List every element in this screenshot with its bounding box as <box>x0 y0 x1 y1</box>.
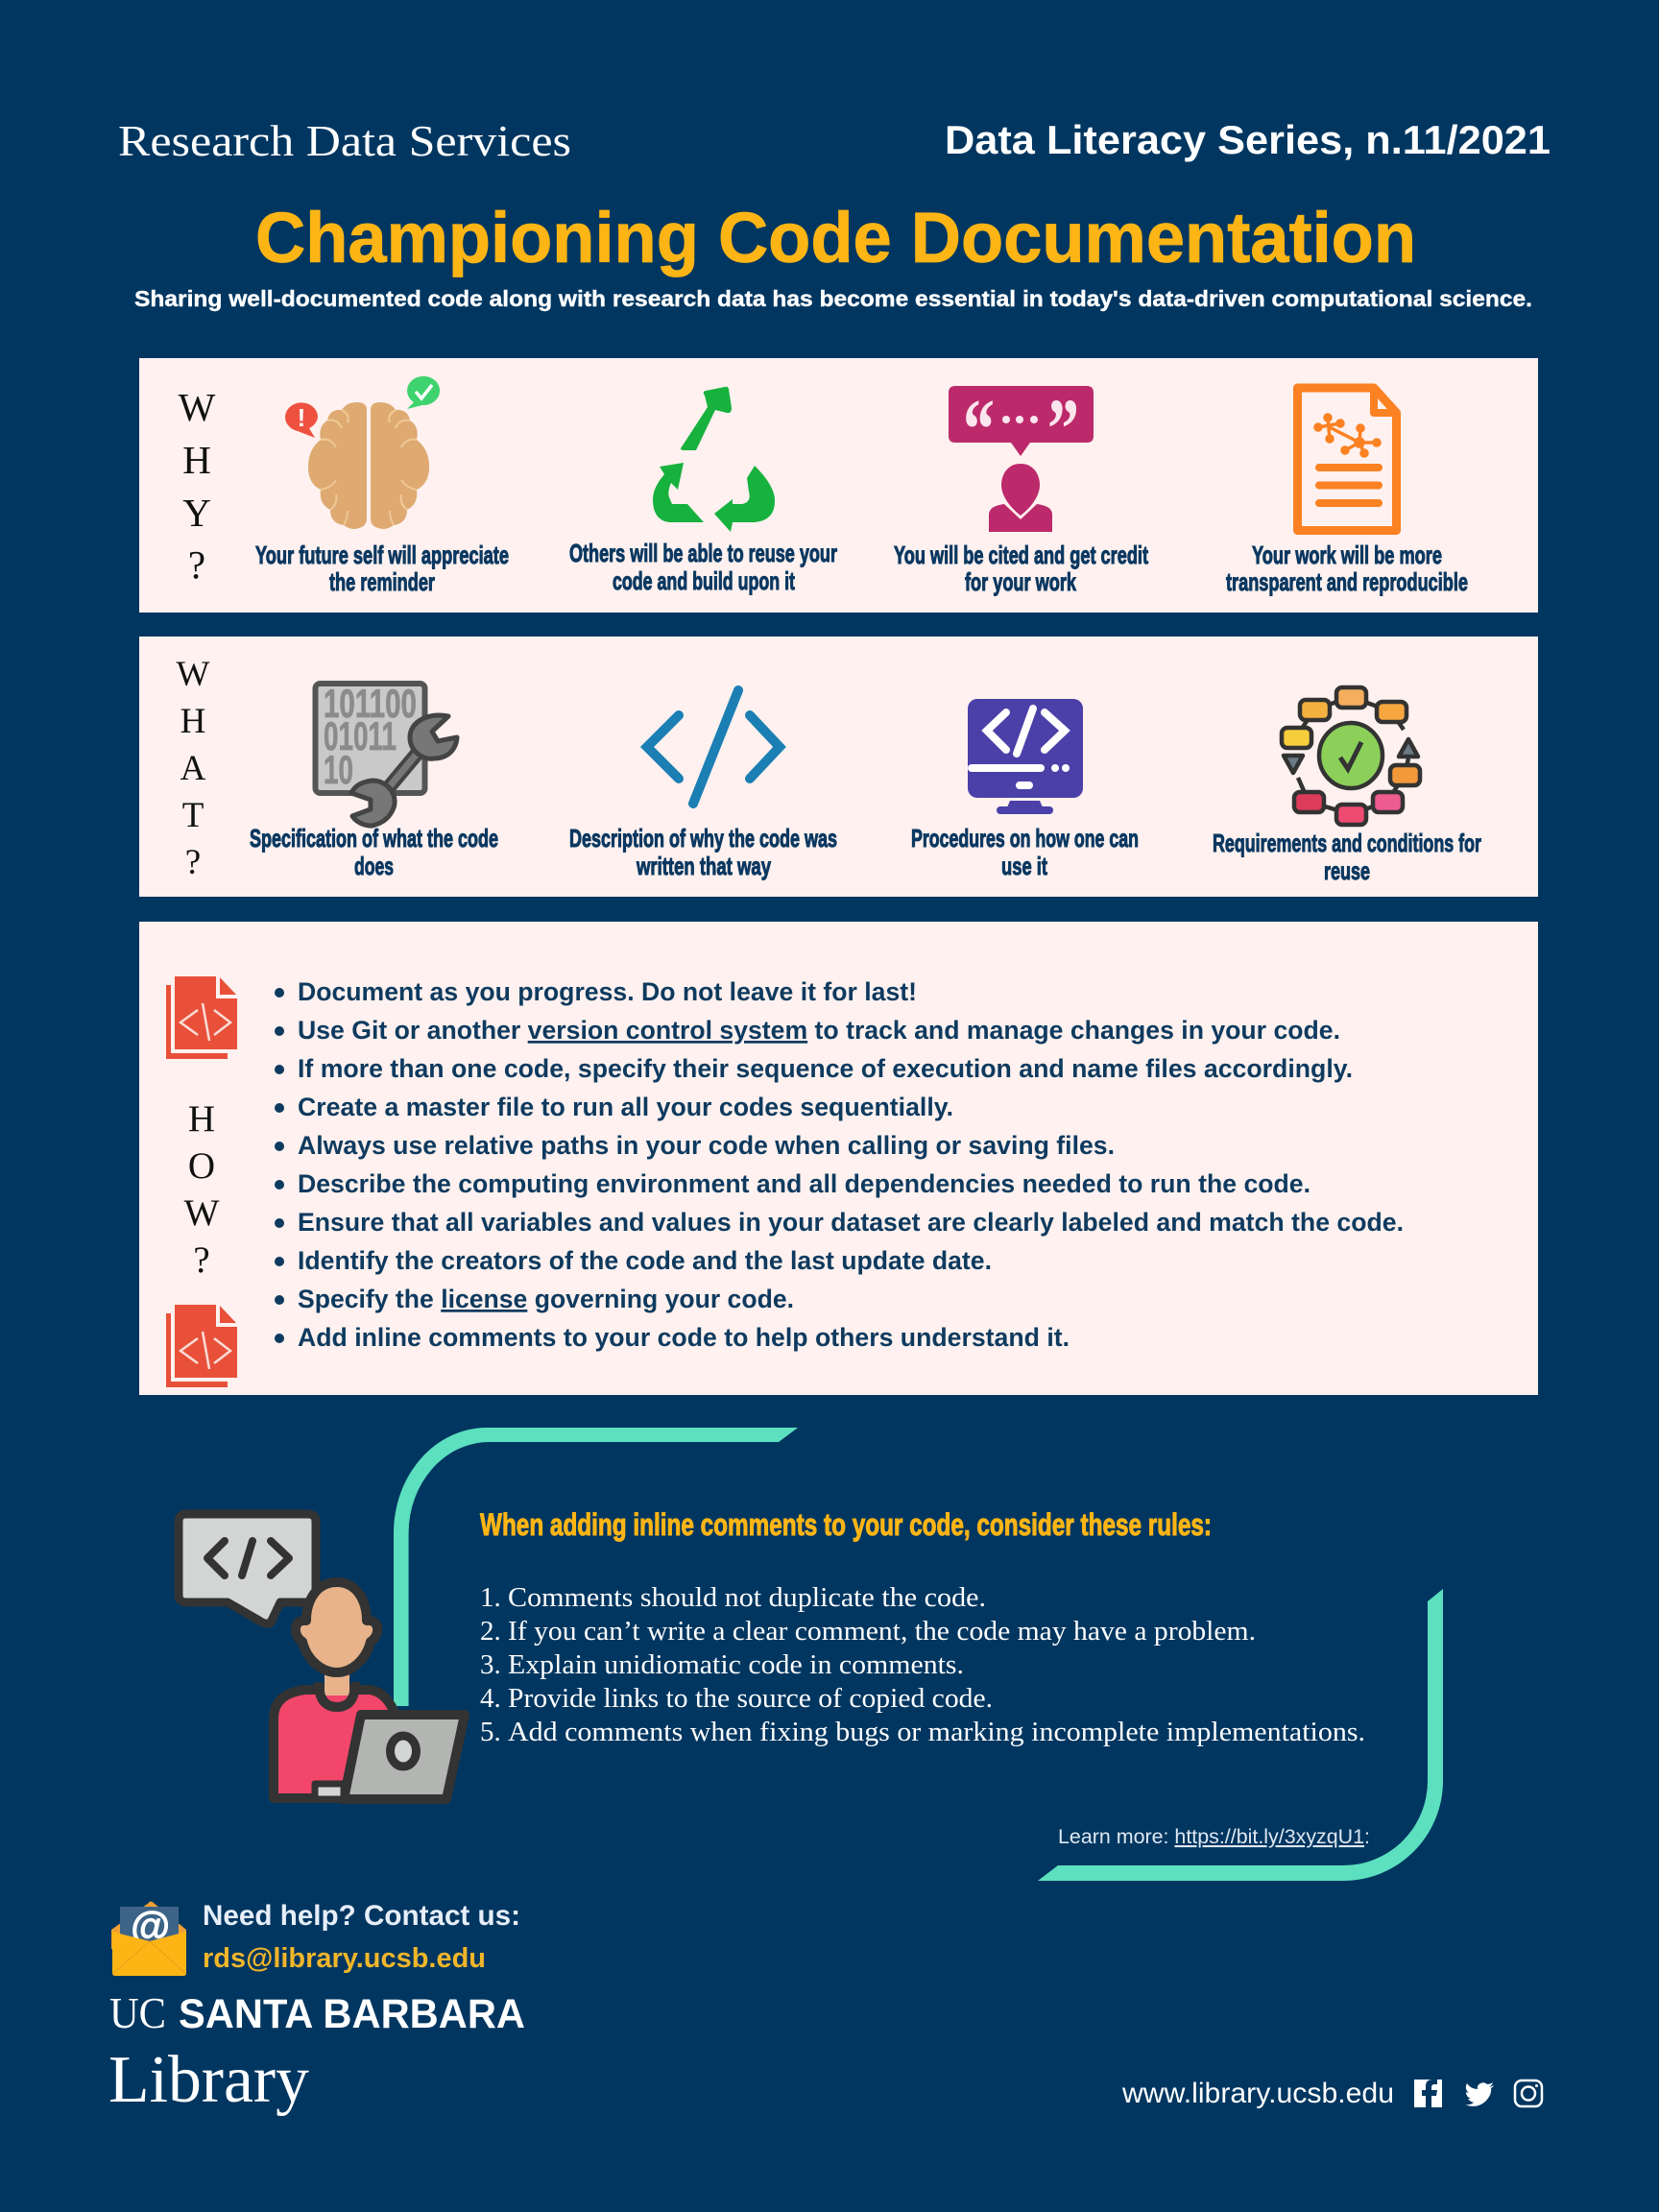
why vertical heading <box>179 385 216 587</box>
numbered rules list: 1. <box>480 1582 501 1613</box>
what vertical heading: T <box>182 796 204 835</box>
numbered rules list: 2. <box>480 1616 501 1647</box>
logo: UC Santa Barbara Library: Library <box>108 2043 309 2117</box>
bullet list: Add inline comments to your code to help others understand it. <box>298 1323 1070 1352</box>
bullet list: Describe the computing environment and all dependencies needed to run the code. <box>298 1169 1310 1198</box>
caption: requirements: reuse <box>1324 856 1370 885</box>
numbered rules list: If you can’t write a clear comment, the code may have a problem. <box>508 1616 1256 1647</box>
panel: why <box>139 358 1538 613</box>
contact email: rds@library.ucsb.edu <box>203 1943 486 1974</box>
icon: brain with speech bubbles: ! <box>298 403 305 432</box>
caption: specification: does <box>354 852 394 880</box>
how vertical heading: ? <box>193 1239 210 1281</box>
caption: future self <box>255 541 509 596</box>
why vertical heading: H <box>182 438 211 482</box>
icon: facebook <box>1414 2080 1442 2107</box>
what vertical heading: W <box>177 655 210 694</box>
numbered rules list: Add comments when fixing bugs or marking incomplete implementations. <box>508 1717 1365 1747</box>
bullet list <box>275 977 1404 1352</box>
caption: description: written that way <box>636 852 771 880</box>
icon: blue code brackets <box>647 690 780 804</box>
bullet list: Identify the creators of the code and the last update date. <box>298 1246 992 1275</box>
logo: UC Santa Barbara Library <box>108 1989 525 2117</box>
caption: requirements <box>1213 829 1481 885</box>
caption: cited: for your work <box>965 567 1076 596</box>
icon: check with workflow loop <box>1282 687 1420 825</box>
heading: inline comment rules: When adding inline comments to your code, consider these rules: <box>480 1507 1212 1542</box>
caption: procedures: use it <box>1001 852 1047 880</box>
caption: future self: Your future self will appreciate <box>255 541 509 569</box>
caption: specification: Specification of what the code <box>250 824 498 853</box>
caption: transparent <box>1226 541 1468 596</box>
caption: requirements: Requirements and conditions for <box>1213 829 1481 857</box>
icon: binary sheet with wrench: 10 <box>324 747 353 792</box>
how vertical heading: O <box>188 1145 215 1187</box>
bullet list: Create a master file to run all your codes sequentially. <box>298 1093 953 1121</box>
teal frame: bottom-right <box>1038 1589 1443 1881</box>
icon: brain with speech bubbles <box>285 376 440 529</box>
numbered rules list: Explain unidiomatic code in comments. <box>508 1649 964 1680</box>
numbered rules list: 3. <box>480 1649 501 1680</box>
caption: description <box>569 824 837 880</box>
panel: what <box>139 637 1538 897</box>
icon: binary sheet with wrench: 101100 <box>324 681 417 726</box>
subtitle: Sharing well-documented code along with research data has become essential in today's data-driven computational science. <box>134 286 1532 311</box>
caption: procedures: Procedures on how one can <box>911 824 1139 853</box>
title: Championing Code Documentation <box>255 198 1416 277</box>
icon: instagram <box>1515 2080 1542 2106</box>
bullet list: Always use relative paths in your code when calling or saving files. <box>298 1131 1115 1160</box>
why vertical heading: ? <box>188 542 205 587</box>
icon: orange document with molecule <box>1298 388 1396 530</box>
caption: procedures <box>911 824 1139 880</box>
website: www.library.ucsb.edu <box>1121 2078 1394 2109</box>
icon: twitter <box>1465 2082 1494 2106</box>
icon: envelope with at sign <box>111 1901 186 1976</box>
what vertical heading <box>177 655 210 882</box>
icon: binary sheet with wrench <box>315 681 457 826</box>
caption: future self: the reminder <box>329 567 435 596</box>
icon: monitor with code <box>968 699 1083 814</box>
icon: citation speech bubble and person: ” <box>1047 382 1079 477</box>
caption: transparent: Your work will be more <box>1252 541 1442 569</box>
bullet list: Ensure that all variables and values in your dataset are clearly labeled and match the code. <box>298 1208 1404 1237</box>
icon: binary sheet with wrench: 01011 <box>324 713 397 758</box>
icon: code file top <box>166 976 237 1059</box>
why vertical heading: W <box>179 385 216 429</box>
how vertical heading: H <box>188 1098 215 1140</box>
logo: UC Santa Barbara Library: UC <box>109 1989 166 2037</box>
header: series label: Data Literacy Series, n.11/2021 <box>945 117 1551 162</box>
logo: UC Santa Barbara Library: SANTA BARBARA <box>179 1991 525 2037</box>
icon: citation speech bubble and person <box>949 382 1094 532</box>
caption: description: Description of why the code was <box>569 824 837 853</box>
what vertical heading: H <box>180 702 205 741</box>
bullet list: Specify the license governing your code. <box>298 1285 794 1313</box>
header: organisation name: Research Data Services <box>118 116 571 165</box>
why vertical heading: Y <box>182 491 211 535</box>
learn more link: Learn more: https://bit.ly/3xyzqU1: <box>1058 1826 1370 1848</box>
panel: how <box>139 922 1538 1395</box>
teal frame: top-left <box>394 1428 798 1706</box>
icon: recycle arrows <box>653 387 775 532</box>
what vertical heading: ? <box>185 843 201 882</box>
how vertical heading: W <box>184 1192 220 1234</box>
numbered rules list: 5. <box>480 1717 501 1747</box>
icon: person with laptop and code bubble <box>179 1514 465 1799</box>
icon: envelope with at sign: @ <box>131 1904 169 1949</box>
caption: cited: You will be cited and get credit <box>894 541 1148 569</box>
contact heading: Need help? Contact us: <box>203 1900 520 1932</box>
numbered rules list: 4. <box>480 1683 501 1714</box>
caption: specification <box>250 824 498 880</box>
numbered rules list: Comments should not duplicate the code. <box>508 1582 986 1613</box>
icon: code file bottom <box>166 1305 237 1387</box>
bullet list: Document as you progress. Do not leave it for last! <box>298 977 917 1006</box>
caption: reuse: Others will be able to reuse your <box>569 539 837 567</box>
caption: cited <box>894 541 1148 596</box>
caption: reuse <box>569 539 837 595</box>
how vertical heading <box>184 1098 220 1281</box>
icon: citation speech bubble and person: “ <box>963 382 995 477</box>
caption: reuse: code and build upon it <box>613 566 795 595</box>
bullet list: Use Git or another version control system to track and manage changes in your code. <box>298 1016 1340 1045</box>
bullet list: If more than one code, specify their sequence of execution and name files accordingly. <box>298 1054 1353 1083</box>
caption: transparent: transparent and reproducible <box>1226 567 1468 596</box>
numbered rules list: Provide links to the source of copied code. <box>508 1683 993 1714</box>
what vertical heading: A <box>180 749 206 788</box>
numbered rules list <box>480 1582 1365 1747</box>
